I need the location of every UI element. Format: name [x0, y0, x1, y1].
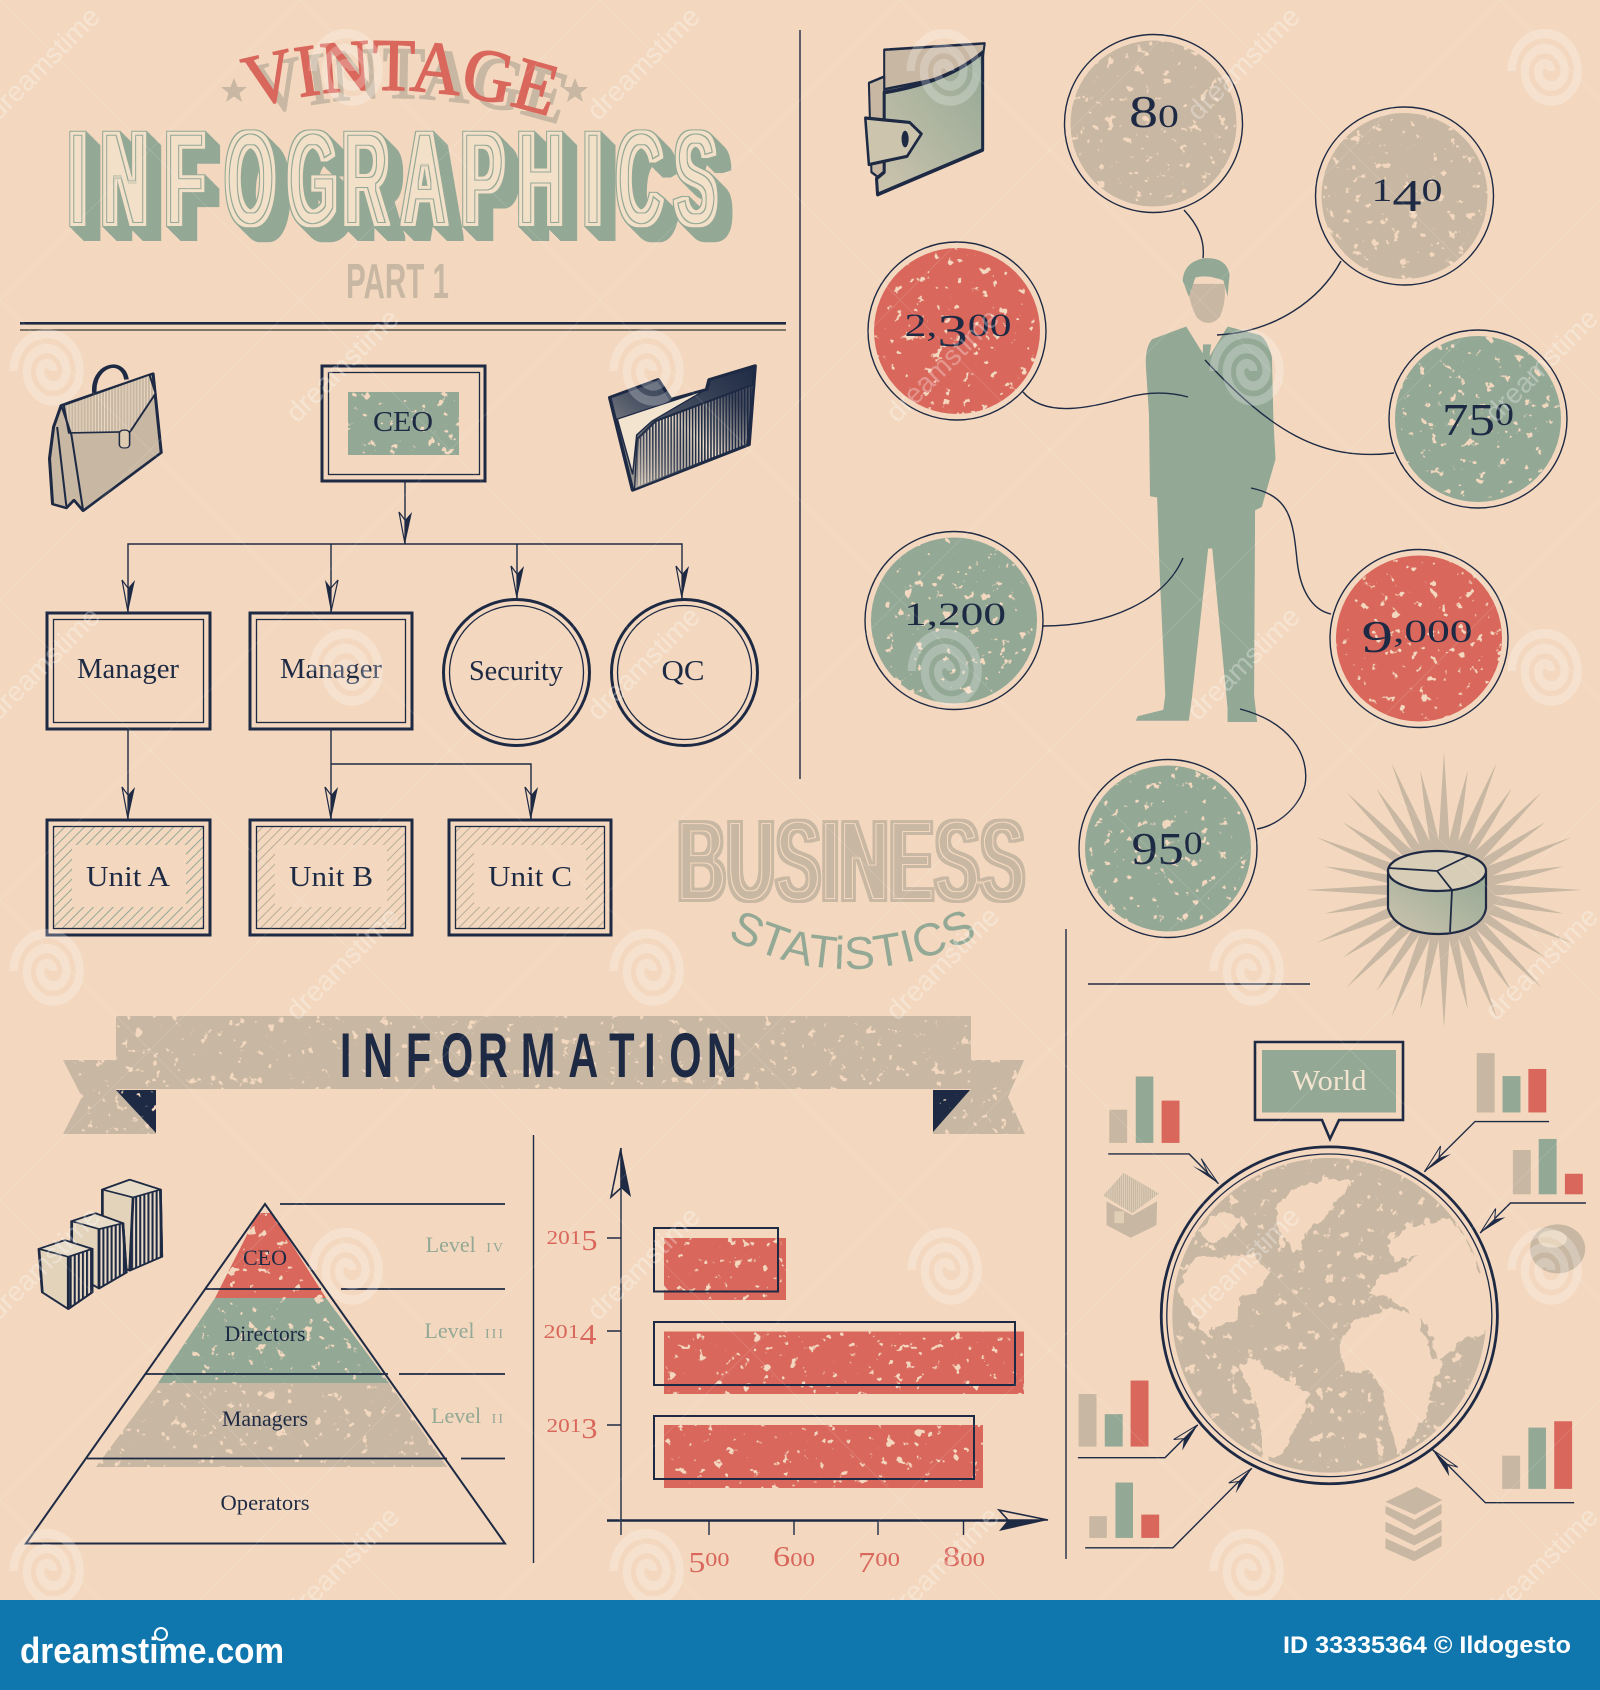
circle: QC: [612, 600, 758, 746]
pie cylinder: [1388, 851, 1486, 934]
icon: stack of books: [1385, 1487, 1442, 1561]
box: CEO: [322, 366, 485, 481]
heading word: BUSINESS: BUSINESS: [677, 796, 1025, 926]
pyramid outline: [26, 1204, 505, 1544]
watermark: dreamstime spirals and text: dreamstime: [280, 901, 405, 1026]
x-axis labels: 500: [688, 1548, 730, 1579]
footer logo mark: [155, 1628, 167, 1640]
icon: briefcase: [49, 366, 161, 511]
heading rule: [20, 322, 786, 331]
heading word: STATiSTICS: STATiSTICS: [732, 912, 974, 970]
box: Unit C: [449, 820, 611, 935]
divider rule: world section: [1088, 983, 1310, 985]
connectors: circles to figure: [1023, 210, 1394, 829]
box: Manager left: Manager: [77, 654, 180, 685]
callout: World: World: [1292, 1065, 1367, 1097]
banner: Information: [63, 1016, 1025, 1134]
subtitle: PART 1: PART 1: [346, 255, 449, 309]
title word: VINTAGE: VINTAGE: [249, 48, 568, 124]
panel: organisation chart: [47, 366, 758, 935]
footer logo: dreamstime.com: [20, 1630, 284, 1671]
icon: pie with sunburst: [1306, 752, 1582, 1028]
watermark: dreamstime spirals and text: dreamstime: [1181, 1201, 1306, 1326]
watermark: dreamstime spirals and text: dreamstime: [280, 303, 405, 428]
icon: coin roll: [1530, 1224, 1585, 1273]
figure: businessman silhouette: [1136, 258, 1276, 722]
banner ribbon: [63, 1016, 1025, 1134]
icon: buildings: [39, 1180, 162, 1309]
stat circle: 1,200: [865, 532, 1043, 710]
banner text: INFORMATION: [340, 1022, 737, 1091]
circle: QC: QC: [662, 656, 704, 687]
circle: Security: [444, 600, 590, 746]
globe: [1161, 1147, 1497, 1484]
bar chart: top left: [1108, 1076, 1218, 1184]
box: Unit A: Unit A: [86, 862, 171, 893]
box: Unit C: Unit C: [488, 862, 572, 893]
panel: world map: [1078, 1042, 1586, 1561]
box: Manager right: Manager: [280, 654, 383, 685]
icon: house: [1103, 1173, 1159, 1238]
level label: Level II: Level II: [431, 1403, 505, 1428]
year labels: 2014: [544, 1320, 596, 1351]
bar chart: left lower: [1078, 1381, 1198, 1458]
stat circle: 950: 950: [1132, 823, 1202, 874]
divider: world vertical: [1065, 929, 1067, 1559]
divider: top vertical: [799, 30, 801, 779]
watermark: dreamstime spirals and text: dreamstime: [1181, 1, 1306, 126]
bar chart: top right: [1424, 1053, 1549, 1172]
watermark: dreamstime spirals and text: dreamstime: [581, 601, 706, 726]
pyramid label: CEO: CEO: [243, 1245, 287, 1270]
connectors: CEO to managers: [122, 481, 689, 613]
heading: Business Statistics: [677, 796, 1026, 970]
pyramid label: Operators: Operators: [220, 1490, 310, 1515]
stat circle: 750: [1389, 330, 1567, 508]
stat circle: 9,000: [1330, 550, 1508, 728]
footer bar: [0, 1600, 1600, 1690]
box: Unit B: Unit B: [289, 862, 373, 893]
bar chart: left bottom: [1085, 1468, 1252, 1548]
stat circle: 1,200: 1,200: [904, 596, 1006, 633]
stat circle: 140: [1316, 107, 1494, 285]
callout: World: [1255, 1042, 1403, 1139]
x-axis labels: 800: [943, 1542, 985, 1573]
x-axis labels: [688, 1542, 985, 1579]
pyramid fill: levels: [96, 1213, 447, 1467]
connectors: managers to units: [122, 729, 538, 820]
divider: pyramid and chart: [532, 1135, 534, 1563]
stat circle: 140: 140: [1372, 170, 1442, 221]
stat circle: 2,300: [868, 242, 1046, 420]
pyramid label: Managers: Managers: [222, 1406, 308, 1431]
year labels: 2015: [546, 1226, 598, 1257]
bars: outlines: [654, 1228, 1015, 1479]
stat circle: 750: 750: [1442, 394, 1514, 445]
circle: Security: Security: [469, 656, 563, 687]
stat circle: 9,000: 9 ,000: [1362, 611, 1472, 662]
icon: folder: [610, 366, 755, 490]
footer credit: ID 33335364 © Ildogesto: [1283, 1632, 1571, 1659]
icon: left star: [221, 78, 247, 102]
box: Unit B: [250, 820, 412, 935]
box: Manager right: [250, 613, 412, 729]
title word: VINTAGE: VINTAGE: [239, 40, 558, 116]
pyramid label: Directors: Directors: [224, 1321, 306, 1346]
level label: Level IV: Level IV: [426, 1232, 505, 1257]
title: Vintage Infographics Part 1: [69, 40, 732, 309]
watermark: dreamstime spirals and text: dreamstime: [581, 1, 706, 126]
title word: INFOGRAPHICS: INFOGRAPHICS: [69, 105, 717, 254]
stat circle: 80: [1064, 34, 1242, 212]
box: Manager left: [47, 613, 210, 729]
x-axis labels: 600: [773, 1542, 815, 1573]
watermark: dreamstime spirals and text: dreamstime: [880, 1501, 1005, 1626]
watermark: dreamstime spirals and text: dreamstime: [581, 1201, 706, 1326]
bars: red fills: [664, 1238, 1024, 1488]
bar chart: right upper: [1480, 1139, 1586, 1233]
box: CEO: CEO: [373, 406, 433, 438]
bar chart: right lower: [1433, 1421, 1574, 1503]
watermark: dreamstime spirals and text: dreamstime: [880, 901, 1005, 1026]
icon: wallet: [865, 43, 985, 195]
stat circle: 80: 80: [1129, 86, 1179, 137]
box: Unit A: [47, 820, 210, 935]
panel: businessman statistics: [865, 34, 1567, 938]
year labels: [544, 1226, 598, 1445]
icon: right star: [562, 78, 588, 102]
x-axis labels: 700: [858, 1548, 900, 1579]
stat circle: 2,300: 2,300: [904, 305, 1012, 356]
chart axes: [607, 1148, 1048, 1535]
watermark: dreamstime spirals and text: dreamstime: [280, 1501, 405, 1626]
sunburst rays: [1306, 752, 1582, 1028]
year labels: 2013: [546, 1414, 598, 1445]
chart: pyramid: [26, 1204, 505, 1544]
chart: horizontal bars: [544, 1148, 1048, 1579]
watermark: dreamstime spirals and text: dreamstime: [880, 303, 1005, 428]
level label: Level III: Level III: [424, 1318, 505, 1343]
stat circle: 950: [1079, 760, 1257, 938]
watermark: dreamstime spirals and text: dreamstime: [1181, 601, 1306, 726]
